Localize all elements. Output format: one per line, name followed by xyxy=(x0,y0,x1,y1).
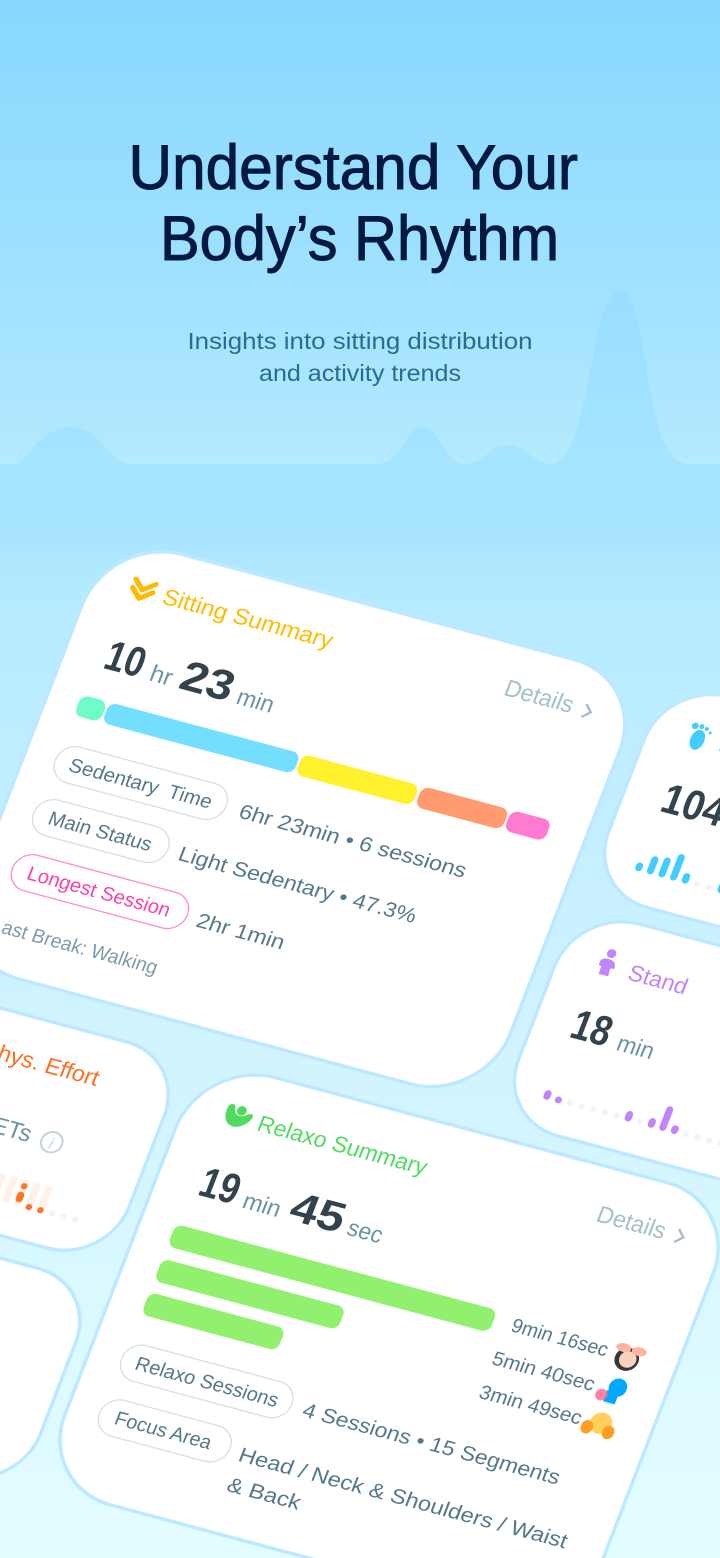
heading: sitting summary: Sitting Summary xyxy=(159,584,338,653)
icon: info: i xyxy=(46,1136,56,1153)
bar chart: steps xyxy=(634,844,720,894)
row: focus area: Focus Area xyxy=(111,1408,216,1454)
bar labels: 3min 49sec xyxy=(476,1382,585,1429)
subtitle xyxy=(188,328,532,386)
horizontal bars: body areas xyxy=(141,1224,498,1401)
metric: total sitting time: 23 xyxy=(173,652,242,711)
metric: stand minutes: min xyxy=(613,1030,658,1065)
panel: sitting summary xyxy=(0,535,647,1104)
heading: stand: Stand xyxy=(624,960,692,999)
row: focus area xyxy=(83,1396,575,1558)
row: sedentary time xyxy=(48,742,473,888)
bar chart: stand xyxy=(542,1074,720,1148)
panel: physical effort xyxy=(0,985,187,1264)
metric: total relaxo time: 19 xyxy=(193,1159,248,1214)
title: Body’s Rhythm xyxy=(160,204,559,274)
bar labels: 9min 16sec xyxy=(508,1315,612,1361)
row: sedentary time: Sedentary Time xyxy=(65,755,215,813)
row: focus area: & Back xyxy=(224,1474,305,1515)
metric: total relaxo time: min xyxy=(239,1188,285,1223)
metric: total sitting time: min xyxy=(233,684,278,719)
metric: total relaxo time xyxy=(193,1159,393,1253)
metric: stand minutes xyxy=(564,1001,665,1068)
wave chart backdrop xyxy=(0,291,720,640)
row: longest session xyxy=(6,850,292,959)
details link: Details xyxy=(593,1201,670,1245)
row: main status xyxy=(27,795,423,933)
panel: lower left card xyxy=(0,1211,98,1492)
icon: hugging emoji xyxy=(579,1408,620,1441)
metric: total sitting time xyxy=(98,632,284,722)
icon: relaxo xyxy=(221,1103,256,1130)
stacked bar xyxy=(74,695,552,841)
title: Understand Your xyxy=(128,133,578,203)
tilted card board xyxy=(0,526,720,1558)
panel: relaxo summary xyxy=(38,1058,720,1558)
metric: total sitting time: hr xyxy=(146,660,177,691)
icon: footprint xyxy=(684,722,714,752)
metric: total sitting time: 10 xyxy=(98,632,153,687)
metric: total relaxo time: 45 xyxy=(283,1184,353,1242)
row: longest session: Longest Session xyxy=(24,863,174,922)
icon: info xyxy=(38,1130,66,1155)
row: sedentary time: 6hr 23min • 6 sessions xyxy=(236,800,470,883)
icon: standing person xyxy=(595,947,621,977)
row: relaxo sessions: 4 Sessions • 15 Segments xyxy=(299,1399,564,1489)
row: main status: Light Sedentary • 47.3% xyxy=(175,843,420,928)
panel: steps xyxy=(586,680,720,971)
row: relaxo sessions: Relaxo Sessions xyxy=(132,1353,282,1412)
subtitle: and activity trends xyxy=(259,360,461,386)
bar chart: effort xyxy=(0,1170,87,1223)
icon: double chevron xyxy=(129,579,156,601)
row: main status: Main Status xyxy=(45,808,155,856)
panel: stand xyxy=(496,907,720,1199)
details link: Details xyxy=(500,675,578,719)
row: focus area: Head / Neck & Shoulders / Waist xyxy=(235,1444,571,1553)
metric: stand minutes: 18 xyxy=(564,1001,619,1056)
bar labels: 5min 40sec xyxy=(489,1348,598,1396)
icon: neck emoji xyxy=(593,1374,630,1406)
icon: head emoji xyxy=(608,1341,648,1375)
row: longest session: 2hr 1min xyxy=(193,909,288,954)
metric: total relaxo time: sec xyxy=(343,1215,387,1249)
heading: relaxo summary: Relaxo Summary xyxy=(254,1110,432,1180)
subtitle: Insights into sitting distribution xyxy=(188,328,532,354)
row: relaxo sessions xyxy=(115,1341,567,1494)
title xyxy=(128,133,578,274)
bar labels xyxy=(476,1314,612,1429)
